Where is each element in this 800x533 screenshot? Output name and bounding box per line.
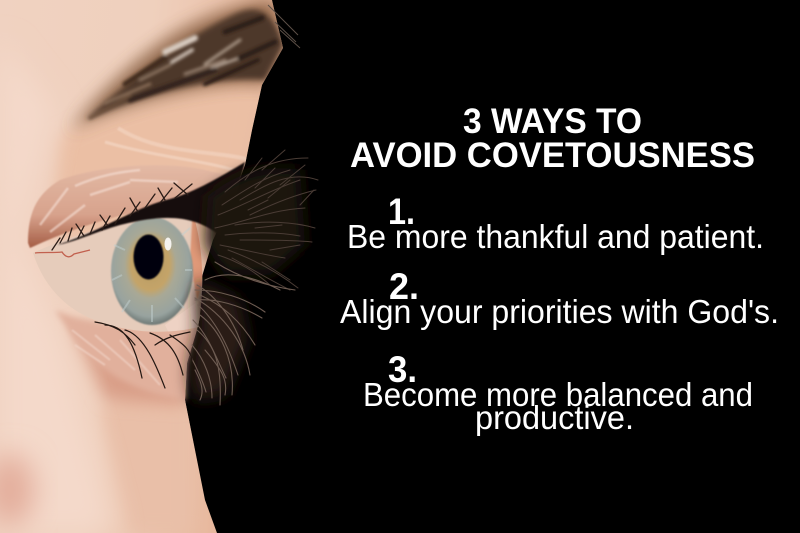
lower lid highlights xyxy=(72,330,160,385)
number 1: 1. xyxy=(388,191,415,232)
text: item 3 first line: Become more balanced and xyxy=(363,376,753,413)
eyeball xyxy=(33,218,202,332)
item 1 xyxy=(347,191,764,255)
number 2: 2. xyxy=(389,266,419,307)
text: item 3 second line: productive. xyxy=(475,399,634,436)
item 2 xyxy=(340,266,779,330)
text: item 1: Be more thankful and patient. xyxy=(347,218,764,255)
eyebrow xyxy=(70,0,300,130)
eyelid highlights xyxy=(40,170,178,232)
text: item 2: Align your priorities with God's. xyxy=(340,293,779,330)
iris xyxy=(111,217,193,325)
heading: 3 WAYS TO xyxy=(463,102,642,141)
lower eyelashes xyxy=(95,262,295,405)
number 3: 3. xyxy=(388,349,417,390)
heading xyxy=(350,102,755,175)
skin of face xyxy=(0,0,290,533)
pupil xyxy=(134,234,164,280)
upper eyelashes xyxy=(52,150,318,290)
photo: woman's eye in profile xyxy=(0,0,318,533)
lower eyelid xyxy=(55,310,195,400)
heading: AVOID COVETOUSNESS xyxy=(350,136,755,175)
item 3 xyxy=(363,349,753,436)
upper eyelid xyxy=(28,165,240,248)
catchlight xyxy=(164,238,172,250)
